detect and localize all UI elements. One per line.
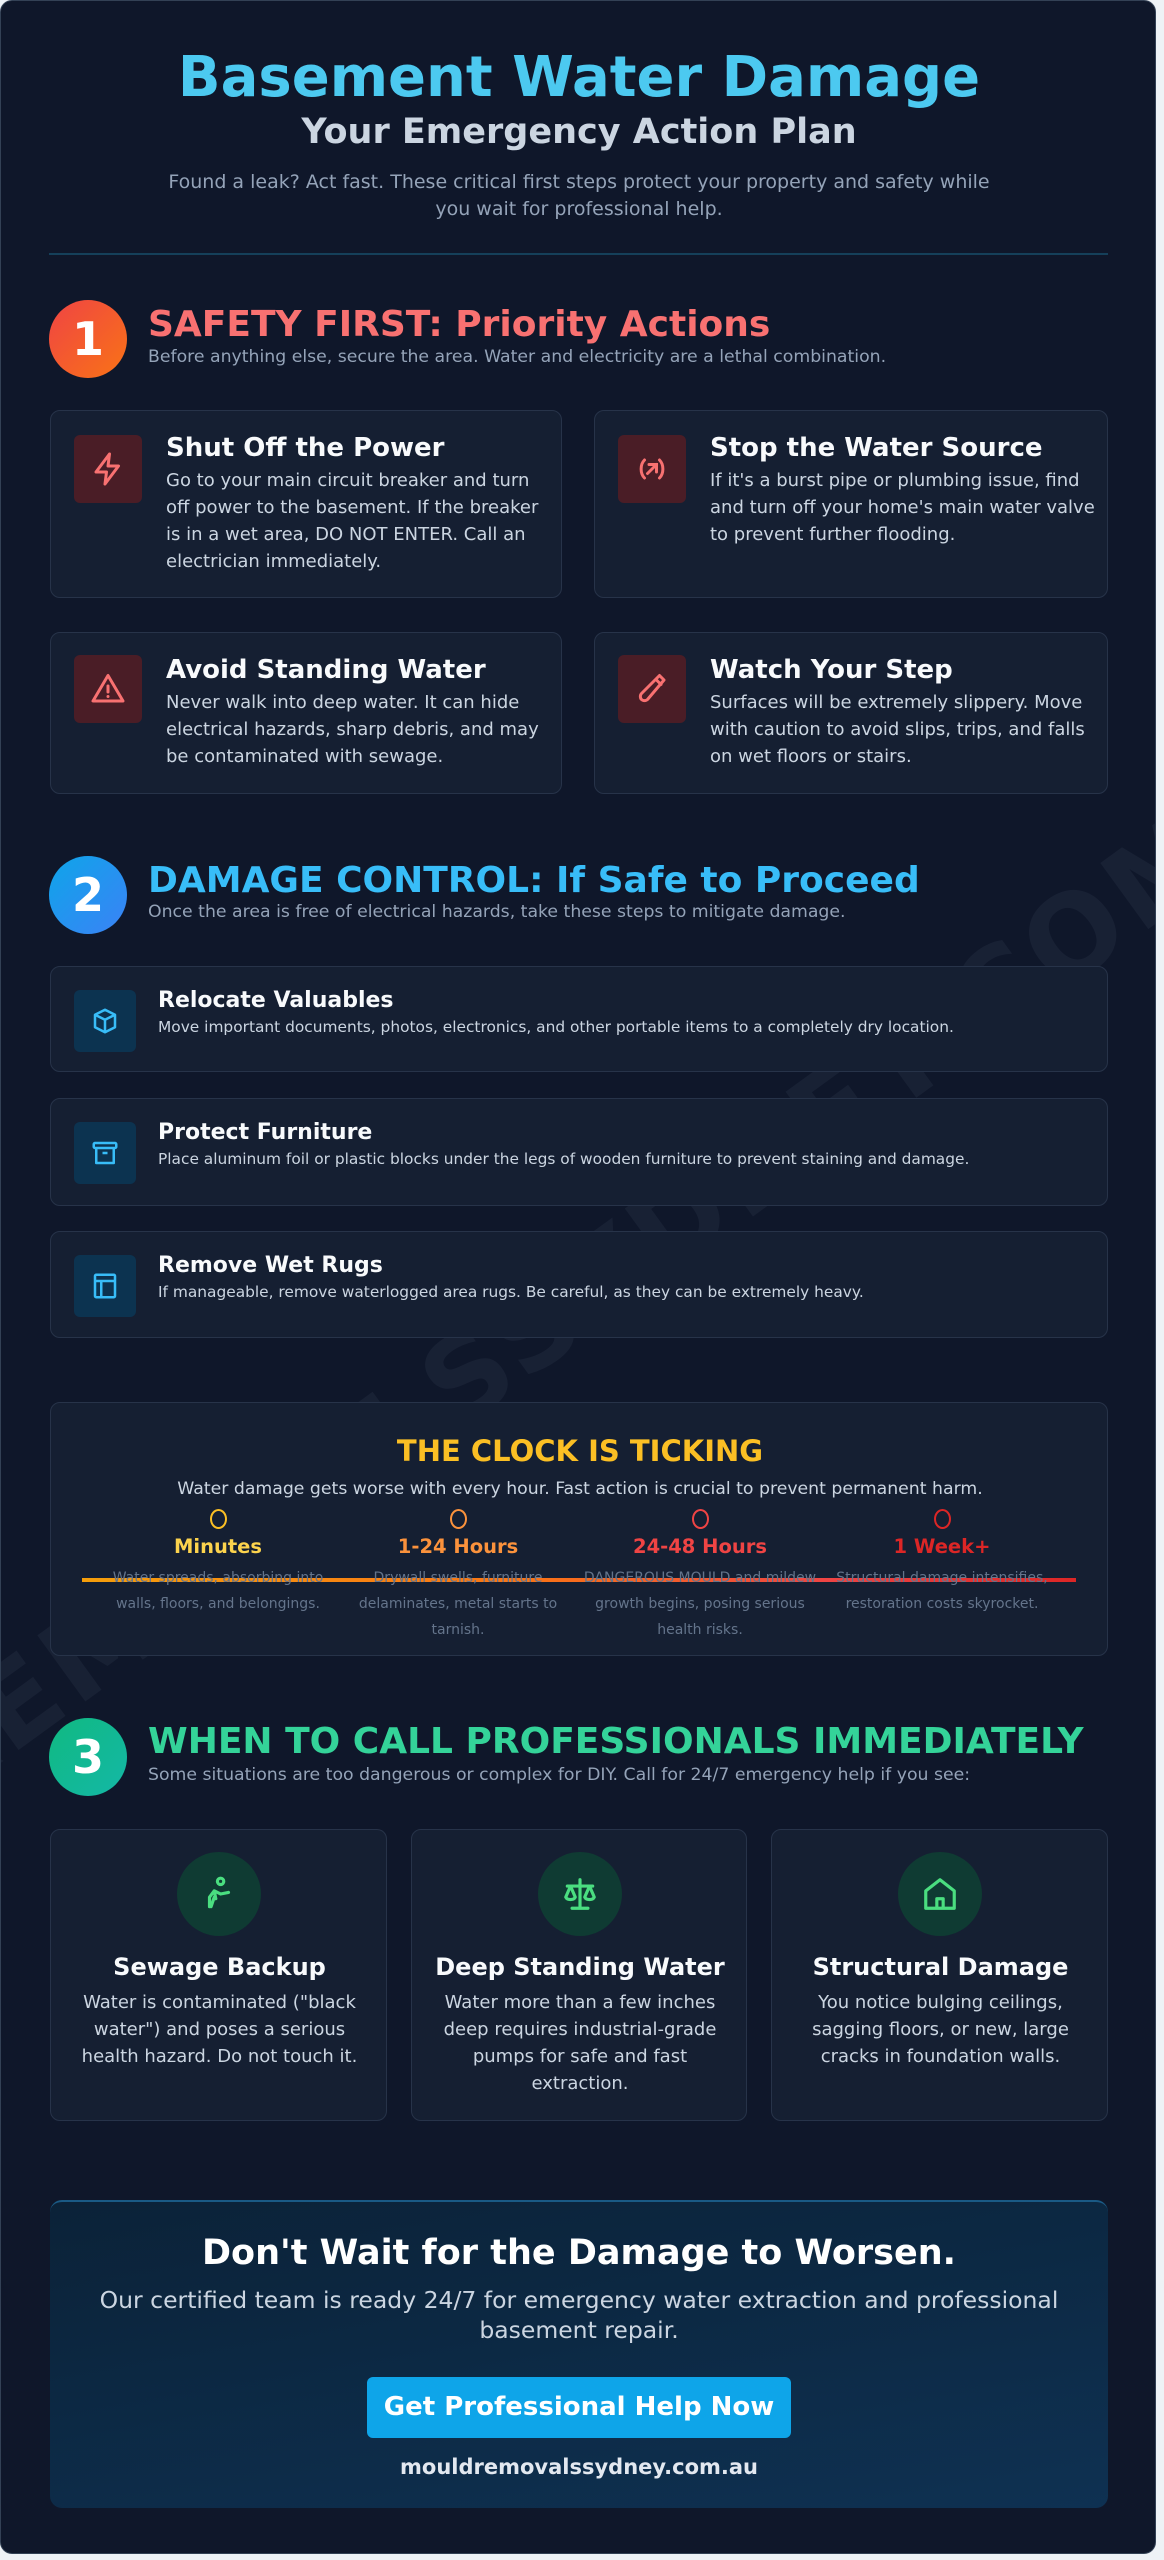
clock subheading: Water damage gets worse with every hour. Fast action is crucial to prevent permanent harm. — [177, 1479, 983, 1499]
section 3 number: 3 — [72, 1730, 104, 1784]
item desc: If manageable, remove waterlogged area rugs. Be careful, as they can be extremely heavy. — [158, 1283, 864, 1301]
timeline step: 24-48 hours: 24-48 Hours — [633, 1535, 767, 1558]
item title: Remove Wet Rugs — [158, 1253, 383, 1278]
website url: mouldremovalssydney.com.au — [400, 2455, 758, 2479]
icon: archive — [74, 1122, 136, 1184]
timeline step: minutes: Water spreads, absorbing into walls, floors, and belongings. — [113, 1570, 323, 1612]
timeline step: 1-24 hours — [359, 1509, 557, 1638]
card body: Water more than a few inches deep requires industrial-grade pumps for safe and fast extraction. — [444, 1992, 716, 2094]
timeline step: 1 week: 1 Week+ — [894, 1535, 990, 1558]
timeline step: 1-24 hours: 1-24 Hours — [398, 1535, 518, 1558]
timeline step: 24-48 hours — [584, 1509, 816, 1638]
section 2 number: 2 — [72, 868, 104, 922]
section 1 subheading: Before anything else, secure the area. Water and electricity are a lethal combination. — [148, 347, 886, 367]
icon: valve — [618, 435, 686, 503]
item desc: Place aluminum foil or plastic blocks under the legs of wooden furniture to prevent staining and damage. — [158, 1150, 969, 1168]
card: structural damage — [771, 1829, 1108, 2121]
card body: Surfaces will be extremely slippery. Move with caution to avoid slips, trips, and falls on wet floors or stairs. — [710, 692, 1085, 767]
icon: house — [898, 1852, 982, 1936]
card body: Water is contaminated ("black water") and poses a serious health hazard. Do not touch it. — [82, 1992, 357, 2067]
icon: boot — [618, 655, 686, 723]
card body: You notice bulging ceilings, sagging floors, or new, large cracks in foundation walls. — [812, 1992, 1069, 2067]
card title: Stop the Water Source — [710, 433, 1043, 463]
card title: Avoid Standing Water — [166, 655, 486, 685]
card title: Structural Damage — [813, 1953, 1068, 1981]
section 3 subheading: Some situations are too dangerous or complex for DIY. Call for 24/7 emergency help if you see: — [148, 1765, 970, 1785]
timeline line — [82, 1578, 1076, 1582]
card: stop water — [594, 410, 1108, 598]
card title: Watch Your Step — [710, 655, 953, 685]
icon: box — [74, 990, 136, 1052]
list card: protect furniture — [50, 1098, 1108, 1206]
section 3 number — [49, 1718, 127, 1796]
icon: warning — [74, 655, 142, 723]
item desc: Move important documents, photos, electronics, and other portable items to a completely dry location. — [158, 1018, 954, 1036]
section 2 number — [49, 856, 127, 934]
card body: Go to your main circuit breaker and turn off power to the basement. If the breaker is in a wet area, DO NOT ENTER. Call an electrician immediately. — [166, 470, 538, 572]
card: watch your step — [594, 632, 1108, 794]
cta button: Get Professional Help Now — [384, 2392, 774, 2422]
card: shut off power — [50, 410, 562, 598]
list card: remove wet rugs — [50, 1231, 1108, 1338]
item title: Relocate Valuables — [158, 988, 394, 1013]
clock heading: THE CLOCK IS TICKING — [397, 1434, 763, 1468]
icon: rug — [74, 1255, 136, 1317]
card body: If it's a burst pipe or plumbing issue, find and turn off your home's main water valve to prevent further flooding. — [710, 470, 1095, 545]
card: sewage backup — [50, 1829, 387, 2121]
panel: clock is ticking — [50, 1402, 1108, 1656]
timeline step: 1 week: Structural damage intensifies, restoration costs skyrocket. — [836, 1570, 1048, 1612]
intro text: Found a leak? Act fast. These critical first steps protect your property and safety while you wait for professional help. — [168, 171, 990, 220]
section 2 subheading: Once the area is free of electrical hazards, take these steps to mitigate damage. — [148, 902, 846, 922]
timeline step: 1 week — [836, 1509, 1048, 1612]
item title: Protect Furniture — [158, 1120, 372, 1145]
icon: lightning — [74, 435, 142, 503]
icon: scales — [538, 1852, 622, 1936]
card: avoid standing water — [50, 632, 562, 794]
card body: Never walk into deep water. It can hide electrical hazards, sharp debris, and may be contaminated with sewage. — [166, 692, 539, 767]
card title: Deep Standing Water — [435, 1953, 725, 1981]
timeline step: minutes: Minutes — [174, 1535, 262, 1558]
timeline step: 1-24 hours: Drywall swells, furniture delaminates, metal starts to tarnish. — [359, 1570, 557, 1638]
section 2 heading: DAMAGE CONTROL: If Safe to Proceed — [148, 860, 920, 901]
timeline step: minutes — [113, 1509, 323, 1612]
cta text: Our certified team is ready 24/7 for emergency water extraction and professional basement repair. — [100, 2286, 1058, 2344]
panel: call to action — [50, 2200, 1108, 2508]
cta heading: Don't Wait for the Damage to Worsen. — [202, 2233, 956, 2273]
icon: person — [177, 1852, 261, 1936]
section 1 number: 1 — [72, 312, 104, 366]
card title: Sewage Backup — [113, 1953, 326, 1981]
cta button — [367, 2377, 791, 2438]
card title: Shut Off the Power — [166, 433, 444, 463]
list card: relocate valuables — [50, 966, 1108, 1072]
subtitle: Your Emergency Action Plan — [301, 112, 857, 152]
card: deep standing water — [411, 1829, 747, 2121]
timeline step: 24-48 hours: DANGEROUS MOULD and mildew growth begins, posing serious health risks. — [584, 1570, 816, 1638]
section 1 heading: SAFETY FIRST: Priority Actions — [148, 304, 770, 345]
section 3 heading: WHEN TO CALL PROFESSIONALS IMMEDIATELY — [148, 1721, 1084, 1762]
section 1 number — [49, 300, 127, 378]
title: Basement Water Damage — [178, 45, 980, 110]
